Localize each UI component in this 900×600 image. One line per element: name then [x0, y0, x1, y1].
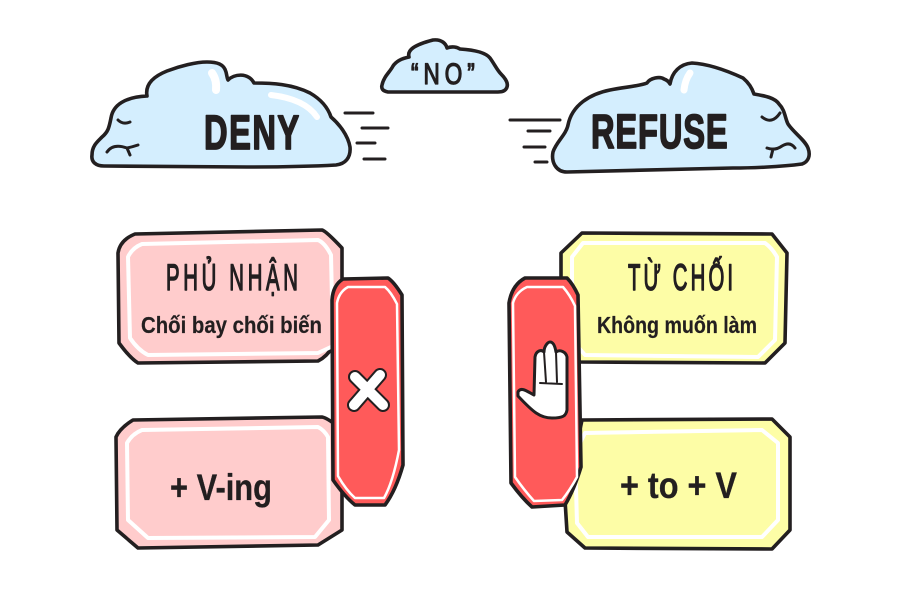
text: + V-ing: + V-ing: [170, 467, 272, 508]
panel: Phủ nhận: [118, 230, 342, 363]
heading: PHỦ NHẬN: PHỦ NHẬN: [166, 257, 298, 299]
cloud: NO: [382, 40, 507, 92]
icon: X mark: [354, 375, 383, 405]
text: Không muốn làm: Không muốn làm: [597, 312, 757, 338]
icon: stop hand: [518, 342, 567, 418]
label: DENY: DENY: [204, 106, 299, 160]
panel: V-ing: [116, 417, 342, 548]
panel: Từ chối: [561, 233, 787, 363]
panel: red bar with hand: [509, 278, 581, 507]
cloud: DENY: [92, 62, 350, 167]
panel: to + V: [565, 419, 790, 549]
face on REFUSE cloud: [762, 113, 795, 157]
highlight on DENY cloud: [212, 73, 317, 117]
heading: TỪ CHỐI: TỪ CHỐI: [628, 257, 733, 299]
text: Chối bay chối biến: Chối bay chối biến: [141, 312, 322, 338]
speed lines: DENY: [345, 113, 388, 159]
label: REFUSE: REFUSE: [591, 105, 728, 159]
highlight on REFUSE cloud: [684, 73, 690, 90]
text: + to + V: + to + V: [620, 465, 737, 506]
label: NO: “NO”: [411, 57, 475, 91]
cloud: REFUSE: [553, 63, 809, 172]
face on DENY cloud: [107, 120, 138, 155]
speed lines: REFUSE: [510, 120, 560, 162]
panel: red bar with X: [332, 278, 403, 505]
